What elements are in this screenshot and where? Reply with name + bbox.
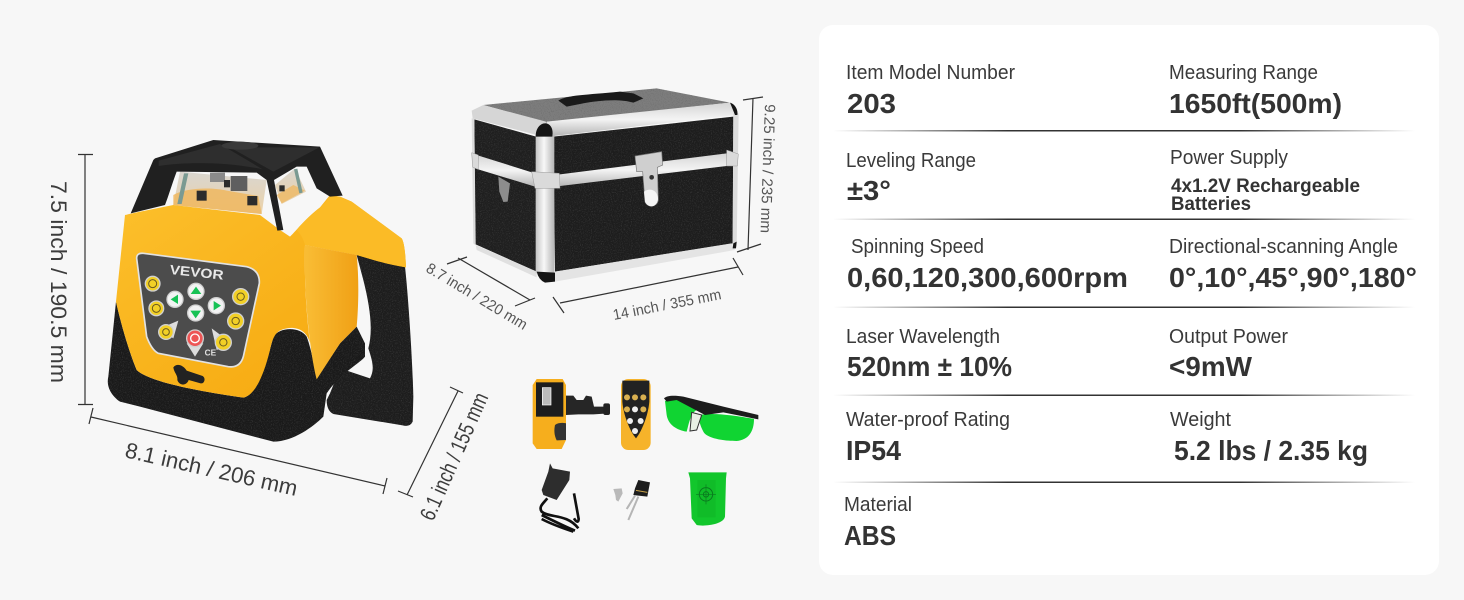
spec: directional-scanning angle: 0°,10°,45°,90°,180° [1169,262,1417,293]
spec: spinning speed: 0,60,120,300,600rpm [847,262,1128,293]
case side posts [472,113,739,247]
spec: power supply: 4x1.2V Rechargeable [1171,176,1360,197]
accessories group [533,379,758,532]
spec: water-proof rating: IP54 [846,435,901,466]
power and mode teardrops [160,321,232,357]
spec: output power: Output Power [1169,326,1288,348]
laser side panel [305,245,358,379]
dimension: laser depth [398,387,493,524]
spec: laser wavelength: Laser Wavelength [846,326,1000,348]
spec: output power [1169,326,1288,382]
spec: item model number: Item Model Number [846,62,1015,84]
spec: power supply [1170,147,1360,215]
illustration: rotary laser level [108,140,413,442]
spec: material: Material [844,494,912,516]
spec: power supply: Power Supply [1170,147,1288,169]
dimension: laser depth: 6.1 inch / 155 mm [415,389,493,524]
spec: weight: 5.2 lbs / 2.35 kg [1174,435,1368,466]
spec: directional-scanning angle [1169,236,1417,293]
accessory: safety glasses [664,396,758,441]
dimension: case length: 14 inch / 355 mm [612,286,723,324]
case handle [558,92,643,107]
spec: power supply: Batteries [1171,194,1251,215]
spec: leveling range: ±3° [847,175,891,206]
laser side knob [173,365,205,384]
laser dome window [173,168,306,214]
dimension: case height: 9.25 inch / 235 mm [757,104,778,233]
case latch [635,152,663,206]
spec: water-proof rating [846,409,1010,466]
spec: weight: Weight [1170,409,1231,431]
spec: laser wavelength: 520nm ± 10% [847,351,1012,382]
accessory: keys and pouch [613,480,650,520]
laser control panel [137,253,259,367]
case bottom rails [555,243,735,282]
accessory: remote control [621,379,651,450]
brand logo: VEVOR [169,262,225,283]
accessory: laser receiver [533,379,610,449]
spec: measuring range: 1650ft(500m) [1169,88,1342,119]
dimension: laser height [46,154,93,404]
dimension: case depth: 8.7 inch / 220 mm [423,260,530,334]
laser grip handle [327,255,413,426]
spec: measuring range: Measuring Range [1169,62,1318,84]
accessory: power adapter [541,463,579,532]
dimension: case height [737,97,778,252]
case corners [536,103,738,283]
case side face [474,119,537,272]
case top rails [547,103,735,136]
spec: output power: <9mW [1169,351,1253,382]
spec: spinning speed [847,236,1128,293]
dimension: laser height: 7.5 inch / 190.5 mm [46,181,71,383]
laser control panel: CE [205,347,217,357]
spec: leveling range [846,150,976,206]
dimension: laser width [89,408,387,501]
spec: water-proof rating: Water-proof Rating [846,409,1010,431]
panel: specifications card [819,25,1439,575]
spec: item model number: 203 [847,88,896,119]
case middle rails [555,153,727,187]
case rail clips [472,150,738,188]
laser roof frame [131,140,343,231]
spec: spinning speed: Spinning Speed [851,236,984,258]
spec: leveling range: Leveling Range [846,150,976,172]
spec: material: ABS [844,520,896,551]
case side clip [498,177,510,202]
laser top aperture [222,142,258,150]
laser handle top highlight [297,197,406,267]
spec: measuring range [1169,62,1342,119]
spec: weight [1170,409,1368,466]
spec dividers [833,130,1415,483]
spec: material [844,494,912,551]
spec: item model number [846,62,1015,119]
laser black base [108,302,365,442]
case top face [483,88,730,123]
dimension: laser width: 8.1 inch / 206 mm [123,437,300,501]
spec: directional-scanning angle: Directional-scanning Angle [1169,236,1398,258]
panel buttons [145,276,249,350]
illustration: carrying case [472,88,739,283]
case front face [553,117,733,272]
dimension: case length [553,258,743,324]
spec: laser wavelength [846,326,1012,382]
accessory: magnetic target plate [688,472,727,526]
case front post [536,135,554,273]
laser yellow body [116,195,406,398]
